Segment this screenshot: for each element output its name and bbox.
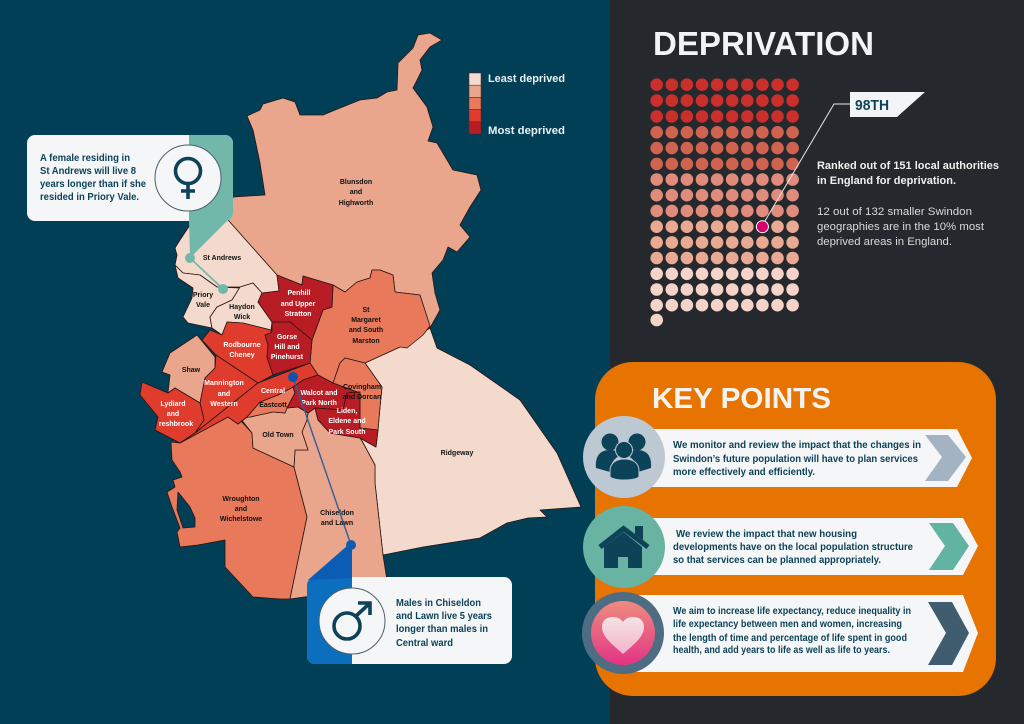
ward: Mannington and Western xyxy=(195,355,258,433)
ward labels: Marston xyxy=(352,338,380,345)
ward labels: St xyxy=(362,307,370,314)
ward labels: and Lawn xyxy=(321,520,353,527)
key point 2: housing: We review the impact that new housing xyxy=(676,528,857,540)
key point 1: population: We monitor and review the impact that the changes in xyxy=(673,439,921,451)
ward labels: Walcot and xyxy=(300,390,338,397)
map legend: Least deprived xyxy=(488,73,565,85)
ward labels: St Andrews xyxy=(203,255,241,262)
key point 1: population: Swindon’s future population will have to plan services xyxy=(673,453,918,465)
map legend: Most deprived xyxy=(488,125,565,137)
heading: key points: KEY POINTS xyxy=(652,383,831,415)
ward labels: Park North xyxy=(301,400,337,407)
callout: 98th rank marker: 98TH xyxy=(855,98,889,114)
text block: deprivation ranking xyxy=(817,160,999,248)
ward labels: Vale xyxy=(196,302,210,309)
connector: female St Andrews to Priory Vale xyxy=(190,258,228,294)
key point 3: life expectancy: life expectancy between men and women, increasing xyxy=(673,618,902,630)
ward: Old Town xyxy=(240,407,308,467)
key point 2: housing: developments have on the local population structure xyxy=(673,541,913,553)
ward: Penhill and Upper Stratton xyxy=(258,275,333,340)
title: Deprivation: DEPRIVATION xyxy=(653,25,874,62)
text block: deprivation ranking: 12 out of 132 smaller Swindon xyxy=(817,206,972,218)
callout: female life expectancy: years longer than if she xyxy=(40,178,146,190)
key point 3: life expectancy: We aim to increase life expectancy, reduce inequality in xyxy=(673,605,911,617)
icon: female symbol xyxy=(155,145,221,211)
ward labels: and South xyxy=(349,327,383,334)
ward labels: Stratton xyxy=(285,311,311,318)
map legend xyxy=(469,73,565,137)
key point 3: life expectancy: the length of time and percentage of life spent in good xyxy=(673,632,907,644)
ward: Wroughton and Wichelstowe xyxy=(167,417,307,599)
ward labels: Gorse xyxy=(277,334,297,341)
ward: Haydon Wick xyxy=(210,283,272,335)
text block: deprivation ranking: deprived areas in England. xyxy=(817,236,952,248)
ward labels: Park South xyxy=(329,429,365,436)
ward: Covingham and Dorcan xyxy=(333,358,382,430)
ward labels: Lydiard xyxy=(160,401,186,408)
ward labels: and xyxy=(218,391,230,398)
dot matrix: 151 local authorities xyxy=(650,78,799,326)
key point 3: life expectancy xyxy=(582,592,978,674)
icon: heart xyxy=(602,617,644,654)
ward labels: Mannington xyxy=(204,380,244,387)
key point 3: life expectancy: health, and add years to life as well as life to years. xyxy=(673,644,890,656)
ward labels: Haydon xyxy=(229,304,255,311)
ward labels: Chiseldon xyxy=(320,510,354,517)
ward: St Margaret and South Marston xyxy=(310,270,430,383)
callout: male life expectancy: Males in Chiseldon xyxy=(396,597,481,609)
callout: male life expectancy: and Lawn live 5 years xyxy=(396,610,492,622)
ward: Priory Vale xyxy=(175,265,240,328)
ward labels: Covingham xyxy=(343,384,381,391)
key point 2: housing: so that services can be planned appropriately. xyxy=(673,554,881,566)
ward: Central xyxy=(180,363,318,443)
icon: people xyxy=(596,434,651,480)
ward labels: Old Town xyxy=(262,432,294,439)
ward: Rodbourne Cheney xyxy=(202,322,273,383)
ward labels: and Dorcan xyxy=(343,394,381,401)
ward labels xyxy=(159,179,473,527)
ward labels: Penhill xyxy=(288,290,311,297)
ward labels: Cheney xyxy=(229,352,255,359)
ward labels: and xyxy=(235,506,247,513)
ward labels: Blunsdon xyxy=(340,179,372,186)
ward labels: Margaret xyxy=(351,317,381,324)
ward: Liden, Eldene and Park South xyxy=(315,392,378,447)
ward labels: Pinehurst xyxy=(271,354,304,361)
ward: Shaw xyxy=(162,335,215,403)
key point 1: population xyxy=(583,416,972,498)
ward labels: reshbrook xyxy=(159,421,193,428)
callout: 98th rank marker xyxy=(756,92,925,233)
key point 1: population: more effectively and efficiently. xyxy=(673,466,815,478)
text block: deprivation ranking: Ranked out of 151 local authorities xyxy=(817,160,999,172)
icon: male symbol xyxy=(319,588,385,654)
ward labels: Liden, xyxy=(337,408,357,415)
ward labels: and Upper xyxy=(281,301,316,308)
text block: deprivation ranking: in England for deprivation. xyxy=(817,175,956,187)
ward labels: Shaw xyxy=(182,367,201,374)
ward: Blunsdon and Highworth xyxy=(228,33,481,328)
ward labels: Western xyxy=(210,401,238,408)
icon: house xyxy=(600,526,648,568)
ward: Eastcott xyxy=(238,387,295,424)
ward labels: and xyxy=(167,411,179,418)
background: dark right column xyxy=(610,0,1024,724)
text block: deprivation ranking: geographies are in the 10% most xyxy=(817,221,984,233)
ward labels: Highworth xyxy=(339,200,373,207)
callout: male life expectancy xyxy=(307,540,512,664)
ward: Ridgeway xyxy=(360,328,581,555)
connector: male Central to Chiseldon xyxy=(288,372,351,545)
ward labels: and xyxy=(350,189,362,196)
ward: St Andrews xyxy=(175,220,279,293)
ward labels: Wichelstowe xyxy=(220,516,262,523)
ward labels: Eldene and xyxy=(328,418,366,425)
ward labels: Central xyxy=(261,388,285,395)
ward map of Swindon xyxy=(140,33,581,599)
ward: Walcot and Park North xyxy=(287,375,357,413)
ward: Gorse Hill and Pinehurst xyxy=(265,322,312,375)
ward labels: Priory xyxy=(193,292,213,299)
ward labels: Eastcott xyxy=(259,402,287,409)
callout: female life expectancy xyxy=(27,135,233,263)
ward labels: Hill and xyxy=(274,344,300,351)
ward: Lydiard and Freshbrook xyxy=(140,382,204,443)
ward labels: Wroughton xyxy=(222,496,260,503)
callout: female life expectancy: A female residing in xyxy=(40,152,130,164)
ward labels: Rodbourne xyxy=(223,342,261,349)
ward labels: Wick xyxy=(234,314,250,321)
ward labels: Ridgeway xyxy=(441,450,473,457)
callout: female life expectancy: resided in Priory Vale. xyxy=(40,191,139,203)
lake cut-out xyxy=(177,492,195,528)
ward: Chiseldon and Lawn xyxy=(290,408,387,599)
callout: male life expectancy: Central ward xyxy=(396,637,453,649)
callout: male life expectancy: longer than males in xyxy=(396,623,488,635)
key point 2: housing xyxy=(583,506,978,588)
callout: female life expectancy: St Andrews will live 8 xyxy=(40,165,136,177)
panel: key points xyxy=(582,362,996,696)
